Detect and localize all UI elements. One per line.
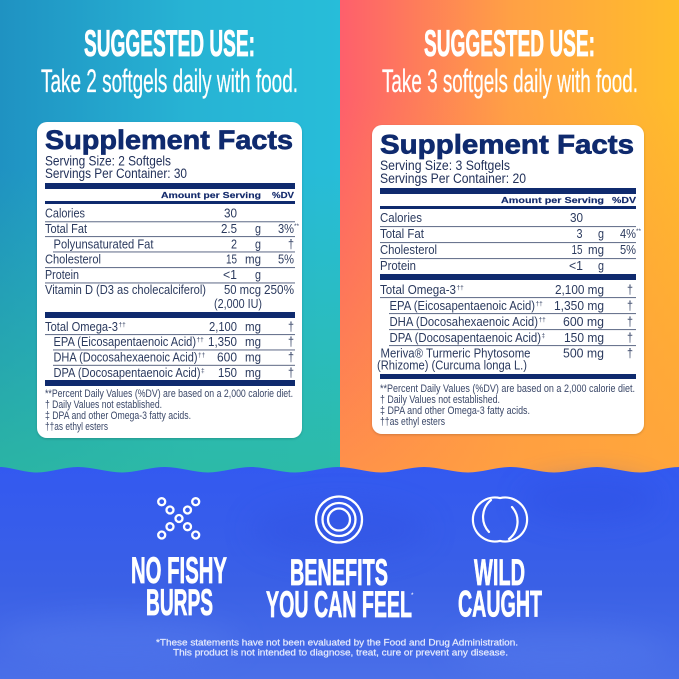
row: protein: g <box>255 267 261 282</box>
row: cholesterol: mg <box>588 242 604 257</box>
row: dha: DHA (Docosahexaenoic Acid) <box>390 314 538 329</box>
footnotes left: **Percent Daily Values (%DV) are based on a 2,000 calorie diet. <box>45 388 293 400</box>
row: vitamin d: 50 mcg <box>224 282 261 297</box>
row: cholesterol <box>380 242 636 257</box>
row: vitamin d: (2,000 IU) <box>214 296 262 311</box>
row: epa: EPA (Eicosapentaenoic Acid) <box>390 298 535 313</box>
row: total fat: g <box>598 226 604 241</box>
row: dpa: † <box>288 365 294 380</box>
panel: blue wave footer <box>0 467 679 679</box>
heading: left suggested use <box>41 23 298 99</box>
row: cholesterol: 15 <box>226 252 237 266</box>
row: epa <box>390 298 633 313</box>
row: dpa: † <box>627 330 633 345</box>
label: benefits you can feel: * <box>411 592 414 599</box>
column headers left: Amount per Serving <box>161 190 261 200</box>
column headers right <box>501 195 636 205</box>
serving information left <box>45 154 187 181</box>
row: calories: Calories <box>45 206 85 220</box>
row: dpa: 150 <box>218 365 237 380</box>
footnotes right: ‡ DPA and other Omega-3 fatty acids. <box>380 405 530 417</box>
row: protein: g <box>598 258 604 273</box>
heading: supplement facts right: Supplement Facts <box>380 130 634 160</box>
row: total omega-3: mg <box>245 319 261 334</box>
row: meriva turmeric: † <box>627 346 633 360</box>
row: polyunsaturated fat: 2 <box>231 236 237 252</box>
serving information right <box>380 158 526 186</box>
icon: overlapping softgel circles <box>473 498 527 542</box>
footnotes right: ††as ethyl esters <box>380 416 445 428</box>
heading: left suggested use: Take 2 softgels daily with food. <box>41 63 298 99</box>
row: dpa: ‡ <box>201 368 205 374</box>
row: total fat: 2.5 <box>221 221 237 236</box>
icon: concentric circles <box>316 496 362 542</box>
row: total fat: 3 <box>576 226 582 241</box>
row: epa: 1,350 <box>208 334 237 349</box>
row: calories <box>45 206 237 220</box>
row: epa: EPA (Eicosapentaenoic Acid) <box>54 334 196 349</box>
row: dha: †† <box>538 316 546 324</box>
panel: right supplement facts card <box>372 125 644 434</box>
footnotes left: ††as ethyl esters <box>45 421 108 433</box>
panel: orange background <box>340 0 679 480</box>
serving information left: Servings Per Container: 30 <box>45 166 187 181</box>
row: epa: mg <box>245 334 261 349</box>
row: total fat: Total Fat <box>45 221 87 236</box>
row: calories: 30 <box>224 206 237 220</box>
row: dha: †† <box>198 352 206 359</box>
heading: left suggested use: SUGGESTED USE: <box>84 23 255 64</box>
column headers left: %DV <box>272 190 294 200</box>
column headers right: Amount per Serving <box>501 195 604 205</box>
row: meriva turmeric: Meriva® Turmeric Phytosome <box>380 346 530 360</box>
row: dha: 600 <box>217 350 237 364</box>
row: meriva turmeric: 500 mg <box>563 346 604 360</box>
label: no fishy burps <box>131 550 227 623</box>
label: wild caught <box>458 552 542 624</box>
row: epa: † <box>288 334 294 349</box>
row: total fat <box>380 226 642 241</box>
row: cholesterol: 5% <box>620 242 636 257</box>
label: no fishy burps: NO FISHY <box>131 550 227 591</box>
row: total omega-3: † <box>288 319 294 334</box>
heading: supplement facts left: Supplement Facts <box>45 125 293 155</box>
column headers left <box>161 190 294 200</box>
footnotes right: **Percent Daily Values (%DV) are based on a 2,000 calorie diet. <box>380 383 635 395</box>
row: meriva turmeric: (Rhizome) (Curcuma longa L.) <box>377 358 527 372</box>
row: cholesterol <box>45 252 294 266</box>
row: calories: Calories <box>380 210 422 225</box>
row: calories <box>380 210 583 225</box>
row: total omega-3: † <box>627 282 633 297</box>
row: polyunsaturated fat: Polyunsaturated Fat <box>54 236 154 252</box>
row: total fat: ** <box>636 228 642 235</box>
row: total omega-3: †† <box>118 322 126 328</box>
row: total omega-3: 2,100 mg <box>555 282 604 297</box>
footnotes left: † Daily Values not established. <box>45 399 162 411</box>
row: protein <box>45 267 261 282</box>
row: total fat: 3% <box>278 221 294 236</box>
row: total fat: g <box>255 221 261 236</box>
row: epa: †† <box>196 336 204 344</box>
label: benefits you can feel: BENEFITS <box>290 552 388 593</box>
row: protein <box>380 258 604 273</box>
row: total omega-3 <box>45 319 294 334</box>
serving information left: Serving Size: 2 Softgels <box>45 154 171 168</box>
row: protein: <1 <box>223 267 237 282</box>
row: total omega-3: Total Omega-3 <box>380 282 456 297</box>
row: cholesterol: 15 <box>572 242 582 257</box>
row: total fat <box>45 221 300 236</box>
row: cholesterol: 5% <box>278 252 294 266</box>
row: polyunsaturated fat: † <box>288 236 294 252</box>
row: dpa: ‡ <box>542 332 546 340</box>
row: protein: Protein <box>380 258 416 273</box>
footnotes right <box>380 383 635 428</box>
row: total omega-3: 2,100 <box>209 319 237 334</box>
row: total omega-3: †† <box>456 284 464 292</box>
panel: left supplement facts card <box>37 122 302 438</box>
row: dha: 600 mg <box>563 314 604 329</box>
serving information right: Serving Size: 3 Softgels <box>380 158 510 173</box>
row: meriva turmeric <box>377 346 633 372</box>
label: wild caught: CAUGHT <box>458 584 542 624</box>
row: cholesterol: mg <box>245 252 261 266</box>
row: polyunsaturated fat: g <box>255 236 261 252</box>
disclaimer <box>156 636 518 658</box>
row: epa: † <box>627 298 633 313</box>
row: calories: 30 <box>570 210 583 225</box>
row: dha: † <box>288 350 294 364</box>
label: benefits you can feel: YOU CAN FEEL <box>266 584 412 625</box>
row: total fat: 4% <box>620 226 636 241</box>
row: dha: mg <box>245 350 261 364</box>
row: cholesterol: Cholesterol <box>380 242 437 257</box>
label: benefits you can feel <box>266 552 414 625</box>
column headers right: %DV <box>612 195 636 205</box>
row: dpa: 150 mg <box>564 330 604 345</box>
row: cholesterol: Cholesterol <box>45 252 101 266</box>
label: no fishy burps: BURPS <box>146 582 213 623</box>
row: dpa: DPA (Docosapentaenoic Acid) <box>390 330 541 345</box>
label: wild caught: WILD <box>474 552 525 593</box>
row: protein: <1 <box>569 258 583 273</box>
row: total omega-3: Total Omega-3 <box>45 319 118 334</box>
row: total fat: Total Fat <box>380 226 424 241</box>
disclaimer: This product is not intended to diagnose, treat, cure or prevent any disease. <box>173 646 508 658</box>
row: protein: Protein <box>45 267 79 282</box>
disclaimer: *These statements have not been evaluated by the Food and Drug Administration. <box>156 636 518 648</box>
row: dha: DHA (Docosahexaenoic Acid) <box>54 350 198 364</box>
row: vitamin d <box>45 282 294 311</box>
row: vitamin d: Vitamin D (D3 as cholecalciferol) <box>45 282 206 297</box>
row: dpa: mg <box>245 365 261 380</box>
row: dpa: DPA (Docosapentaenoic Acid) <box>54 365 200 380</box>
row: dha: † <box>627 314 633 329</box>
footnotes left: ‡ DPA and other Omega-3 fatty acids. <box>45 410 191 422</box>
footnotes left <box>45 388 293 433</box>
row: polyunsaturated fat <box>54 236 294 252</box>
panel: teal background <box>0 0 340 480</box>
row: total omega-3 <box>380 282 633 297</box>
serving information right: Servings Per Container: 20 <box>380 171 526 186</box>
row: epa: †† <box>536 300 543 308</box>
footnotes right: † Daily Values not established. <box>380 394 500 406</box>
icon: x of rings <box>158 498 199 538</box>
heading: right suggested use <box>382 23 638 99</box>
row: vitamin d: 250% <box>264 282 294 297</box>
row: total fat: ** <box>294 223 300 230</box>
row: epa: 1,350 mg <box>554 298 604 313</box>
